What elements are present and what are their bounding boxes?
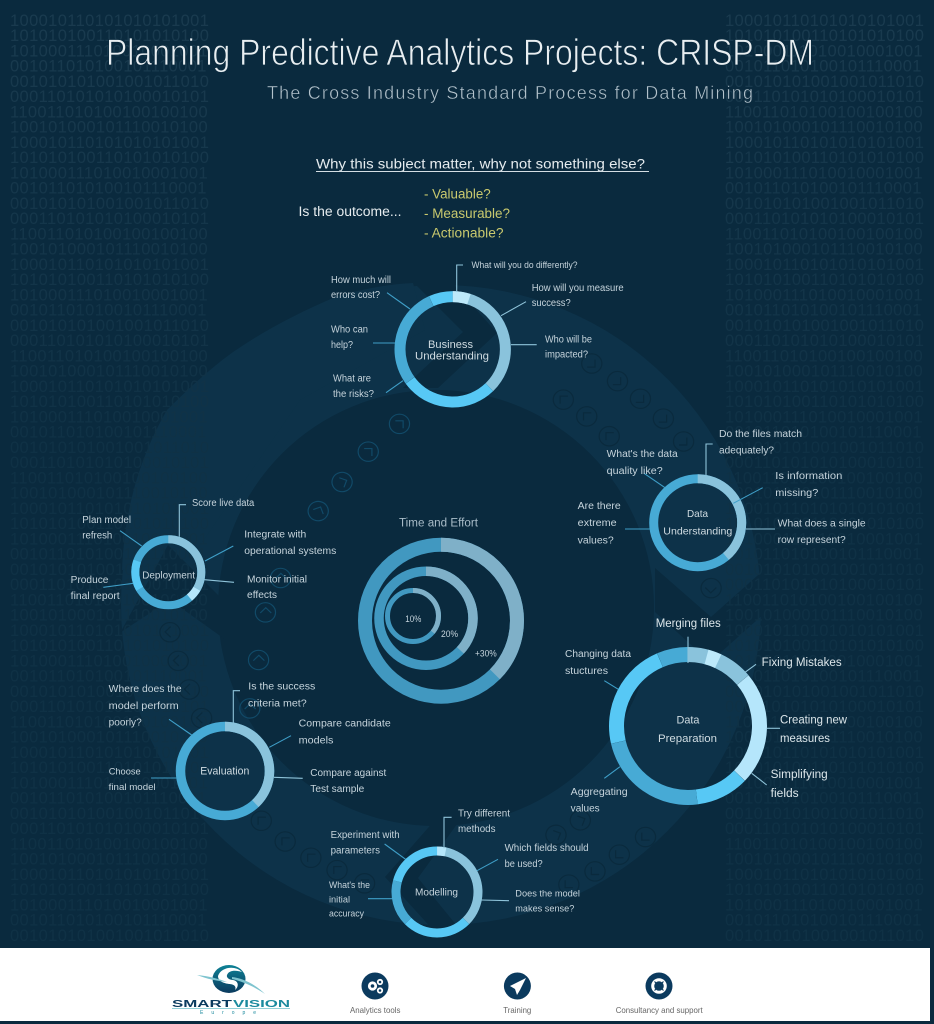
center label: evaluation: Evaluation xyxy=(200,766,249,778)
binary code texture: right: 101010100110101010100 xyxy=(725,393,924,411)
percentage labels: 20% xyxy=(441,629,458,640)
binary code texture: left: 100101000101110010100 xyxy=(10,851,208,869)
binary code texture: left: 101000111010010001001 xyxy=(10,896,208,914)
binary code texture: right: 100010110101010101001 xyxy=(725,622,924,640)
binary code texture: right: 101010100110101010100 xyxy=(725,271,924,289)
logo: Smart Vision Europe xyxy=(172,965,290,1016)
panel: evaluation xyxy=(109,682,391,816)
ring: evaluation xyxy=(180,726,270,816)
outcome criteria: - Valuable? xyxy=(424,186,491,202)
binary code texture: left: 110011010100100100100 xyxy=(10,104,208,122)
percentage labels xyxy=(405,614,497,660)
question: what will you do differently xyxy=(457,260,578,292)
question: where does the model perform poorly: Where does the xyxy=(109,684,182,695)
binary code texture: left: 101000111010010001001 xyxy=(10,774,208,792)
chart title: Time and Effort xyxy=(399,518,479,530)
logo: Smart Vision Europe: VISION xyxy=(233,999,290,1010)
binary code texture: left: 001011010100101110001 xyxy=(10,58,207,76)
question: do the files match: Do the files match xyxy=(719,429,802,440)
question: extreme values: Are there xyxy=(578,501,621,512)
binary code texture: right: 100010110101010101001 xyxy=(725,12,924,30)
footer band xyxy=(0,948,930,1021)
binary code texture: left: 000110101010100010101 xyxy=(10,454,209,472)
binary code texture: left: 000110101010100010101 xyxy=(10,698,209,716)
question: initial accuracy xyxy=(329,880,392,918)
binary code texture: right: 101010100110101010100 xyxy=(725,881,924,899)
binary code texture: left: 100010110101010101001 xyxy=(10,622,209,640)
binary code texture: left: 001010101001001011010 xyxy=(10,73,209,91)
label: training: Training xyxy=(503,1005,532,1015)
binary code texture: left: 110011010100100100100 xyxy=(10,836,208,854)
question: is the success criteria met: Is the success xyxy=(248,682,315,692)
task: integrate with operational systems: Integrate with xyxy=(244,530,306,540)
binary code texture: right: 101000111010010001001 xyxy=(725,164,923,182)
task: merging files: Merging files xyxy=(656,618,721,630)
question: how will you measure success: success? xyxy=(532,298,571,309)
binary code texture: left: 001010101001001011010 xyxy=(10,439,209,457)
binary code texture: right: 110011010100100100100 xyxy=(725,714,923,732)
binary code texture: left: 100010110101010101001 xyxy=(10,256,209,274)
question: is the success criteria met xyxy=(233,682,315,723)
middle ring: 20 percent xyxy=(379,571,473,665)
outcome criteria: - Measurable? xyxy=(424,206,510,221)
binary code texture: left: 100101000101110010100 xyxy=(10,607,208,625)
center label: modelling: Modelling xyxy=(415,888,458,898)
center label: business understanding: Understanding xyxy=(415,350,489,362)
binary code texture: left: 101010100110101010100 xyxy=(10,271,209,289)
binary code texture: left: 101000111010010001001 xyxy=(10,42,208,60)
binary code texture: right: 101000111010010001001 xyxy=(725,530,923,548)
binary code texture: right: 001010101001001011010 xyxy=(725,927,924,945)
task: changing data structures: stuctures xyxy=(565,666,608,677)
question: what are the risks: What are xyxy=(333,374,371,384)
binary code texture: left: 101010100110101010100 xyxy=(10,149,209,167)
binary code texture: left: 000110101010100010101 xyxy=(10,820,209,838)
task: simplifying fields: Simplifying xyxy=(771,769,828,781)
question: how will you measure success: How will you measure xyxy=(532,283,624,294)
task: changing data structures xyxy=(565,649,631,689)
task: choose final model xyxy=(109,766,177,793)
task: produce final report: final report xyxy=(71,591,120,602)
question: initial accuracy: What's the xyxy=(329,880,370,890)
task: compare candidate models: models xyxy=(299,736,333,746)
binary code texture: left: 101010100110101010100 xyxy=(10,27,209,45)
panel: data understanding xyxy=(578,429,866,567)
binary code texture: left: 001011010100101110001 xyxy=(10,546,207,564)
binary code texture: left: 100010110101010101001 xyxy=(10,500,209,518)
binary code texture: left: 101010100110101010100 xyxy=(10,637,209,655)
question: what will you do differently: What will you do differently? xyxy=(472,260,578,271)
binary code texture: right: 110011010100100100100 xyxy=(725,836,923,854)
binary code texture: left: 001010101001001011010 xyxy=(10,927,209,945)
binary code texture: right: 100010110101010101001 xyxy=(725,256,924,274)
background circular process arrows xyxy=(112,278,766,932)
task: experiment with parameters xyxy=(331,830,406,859)
binary code texture: right: 101010100110101010100 xyxy=(725,149,924,167)
outcome criteria: - Actionable? xyxy=(424,226,504,241)
subtitle: The Cross Industry Standard Process for Data Mining xyxy=(267,83,753,103)
center label: data understanding: Understanding xyxy=(663,526,732,538)
task: simplifying fields xyxy=(752,769,828,800)
binary code texture: right: 100101000101110010100 xyxy=(725,363,923,381)
binary code texture: right: 001011010100101110001 xyxy=(725,546,922,564)
binary code texture: left: 110011010100100100100 xyxy=(10,470,208,488)
binary code texture: right: 100010110101010101001 xyxy=(725,134,924,152)
question: what are the risks: the risks? xyxy=(333,389,374,400)
binary code texture: left: 000110101010100010101 xyxy=(10,88,209,106)
binary code texture: left: 000110101010100010101 xyxy=(10,332,209,350)
binary code texture: right: 001010101001001011010 xyxy=(725,195,924,213)
binary code texture: right: 101000111010010001001 xyxy=(725,408,923,426)
question: do the files match: adequately? xyxy=(719,446,774,456)
binary code texture: left: 100010110101010101001 xyxy=(10,12,209,30)
ring: data understanding xyxy=(654,479,742,567)
binary code texture: right: 110011010100100100100 xyxy=(725,592,923,610)
binary code texture: left: 101010100110101010100 xyxy=(10,759,209,777)
question: who can help xyxy=(331,324,395,351)
question: single row: What does a single xyxy=(778,518,866,530)
center label: data preparation: Preparation xyxy=(658,733,717,745)
question: single row xyxy=(746,518,866,546)
label: consultancy and support: Consultancy and support xyxy=(616,1005,703,1015)
task: monitor initial effects xyxy=(204,574,307,601)
binary code texture: right: 001010101001001011010 xyxy=(725,683,924,701)
question: how will you measure success xyxy=(501,283,624,316)
question: who can help: Who can xyxy=(331,324,368,336)
panel: modelling xyxy=(329,808,589,950)
task: compare against test sample: Compare against xyxy=(310,768,387,779)
ring: business understanding xyxy=(378,275,527,424)
task: creating new measures: measures xyxy=(780,733,830,745)
ring: deployment xyxy=(123,527,213,617)
center label: data preparation: Data xyxy=(676,714,700,726)
binary code texture: right: 001011010100101110001 xyxy=(725,790,922,808)
task: produce final report: Produce xyxy=(71,575,109,586)
binary code texture: left: 101010100110101010100 xyxy=(10,881,209,899)
question: single row: row represent? xyxy=(778,535,846,546)
task: integrate with operational systems xyxy=(205,530,336,561)
task: integrate with operational systems: operational systems xyxy=(244,546,336,557)
question: extreme values: extreme xyxy=(578,518,617,529)
binary code texture: right: 001010101001001011010 xyxy=(725,805,924,823)
binary code texture: left: 001011010100101110001 xyxy=(10,912,207,930)
binary code texture: right: 101010100110101010100 xyxy=(725,637,924,655)
question: who can help: help? xyxy=(331,340,353,351)
task: choose final model: Choose xyxy=(109,766,141,778)
question: do the files match xyxy=(706,429,802,475)
task: compare candidate models: Compare candidate xyxy=(299,718,391,730)
task: fixing mistakes xyxy=(745,657,842,672)
binary code texture: left: 100010110101010101001 xyxy=(10,744,209,762)
task: produce final report xyxy=(71,575,133,602)
binary code texture: left: 001011010100101110001 xyxy=(10,424,207,442)
binary code texture: right: 000110101010100010101 xyxy=(725,454,924,472)
task: try different methods: methods xyxy=(458,824,496,835)
percentage labels: +30% xyxy=(475,648,497,660)
binary code texture: right: 101000111010010001001 xyxy=(725,286,923,304)
task: compare candidate models xyxy=(269,718,391,747)
binary code texture: right: 101000111010010001001 xyxy=(725,896,923,914)
binary code texture: left: 110011010100100100100 xyxy=(10,714,208,732)
task: try different methods: Try different xyxy=(458,808,510,820)
binary code texture: left: 000110101010100010101 xyxy=(10,576,209,594)
ring: modelling xyxy=(379,834,495,950)
task: plan model refresh xyxy=(82,515,142,546)
question: initial accuracy: accuracy xyxy=(329,908,364,918)
binary code texture: left: 100010110101010101001 xyxy=(10,866,209,884)
outer ring: 30 percent xyxy=(365,545,517,697)
question: how much will errors cost: errors cost? xyxy=(331,290,380,301)
binary code texture: right: 001011010100101110001 xyxy=(725,668,922,686)
question: does the model make sense: makes sense? xyxy=(515,904,574,915)
question: who will be impacted: impacted? xyxy=(545,350,588,360)
task: experiment with parameters: Experiment with xyxy=(331,830,400,841)
question: extreme values: values? xyxy=(578,536,614,546)
question: who will be impacted: Who will be xyxy=(545,334,592,346)
panel: time and effort chart xyxy=(365,518,517,697)
binary code texture: right: 000110101010100010101 xyxy=(725,210,924,228)
question: where does the model perform poorly: model perform xyxy=(109,701,179,712)
question: how much will errors cost: How much will xyxy=(331,275,391,286)
task: score live data xyxy=(179,498,255,537)
task: creating new measures: Creating new xyxy=(780,714,848,726)
question: is information missing xyxy=(733,471,842,503)
question: is the success criteria met: criteria met? xyxy=(248,698,307,710)
task: simplifying fields: fields xyxy=(771,788,799,800)
binary code texture: right: 000110101010100010101 xyxy=(725,820,924,838)
icon: paper plane xyxy=(504,972,531,1000)
question: is information missing: missing? xyxy=(775,488,819,499)
task: changing data structures: Changing data xyxy=(565,649,631,660)
binary code texture: right: 000110101010100010101 xyxy=(725,88,924,106)
binary code texture: right: 100101000101110010100 xyxy=(725,607,923,625)
binary code texture: left: 101000111010010001001 xyxy=(10,286,208,304)
question: how much will errors cost xyxy=(331,275,410,309)
binary code texture: right: 001011010100101110001 xyxy=(725,424,922,442)
task: aggregating values: values xyxy=(571,804,600,815)
binary code texture: right: 101000111010010001001 xyxy=(725,652,923,670)
binary code texture: left: 110011010100100100100 xyxy=(10,348,208,366)
binary code texture: right: 001011010100101110001 xyxy=(725,912,922,930)
question: does the model make sense: Does the model xyxy=(515,888,580,900)
binary code texture: left: 100101000101110010100 xyxy=(10,119,208,137)
task: monitor initial effects: effects xyxy=(247,590,277,601)
binary code texture: left: 001010101001001011010 xyxy=(10,683,209,701)
binary code texture: right: 100101000101110010100 xyxy=(725,851,923,869)
logo: Smart Vision Europe: SMART xyxy=(172,999,232,1010)
binary code texture: left: 001010101001001011010 xyxy=(10,561,209,579)
binary code texture: right: 001011010100101110001 xyxy=(725,180,922,198)
binary code texture: left: 001011010100101110001 xyxy=(10,790,207,808)
task: plan model refresh: refresh xyxy=(82,530,112,542)
task: monitor initial effects: Monitor initial xyxy=(247,574,307,586)
binary code texture: left: 001010101001001011010 xyxy=(10,195,209,213)
task: aggregating values: Aggregating xyxy=(571,787,628,798)
binary code texture: left: 101010100110101010100 xyxy=(10,393,209,411)
binary code texture: right: 101010100110101010100 xyxy=(725,759,924,777)
center label: data understanding: Data xyxy=(687,508,708,520)
title: Planning Predictive Analytics Projects: CRISP-DM xyxy=(106,32,814,73)
center label: deployment: Deployment xyxy=(142,570,195,582)
question: who will be impacted xyxy=(511,334,592,360)
binary code texture: right: 101000111010010001001 xyxy=(725,42,923,60)
binary code texture: left: 110011010100100100100 xyxy=(10,592,208,610)
task: merging files xyxy=(656,618,721,663)
binary code texture: left: 100101000101110010100 xyxy=(10,729,208,747)
task: plan model refresh: Plan model xyxy=(82,515,131,526)
icon: gears xyxy=(362,972,388,1000)
task: experiment with parameters: parameters xyxy=(331,846,380,856)
binary code texture: right: 101010100110101010100 xyxy=(725,515,924,533)
binary code texture: right: 001010101001001011010 xyxy=(725,439,924,457)
binary code texture: right: 100101000101110010100 xyxy=(725,485,923,503)
binary code texture: right: 000110101010100010101 xyxy=(725,698,924,716)
question: where does the model perform poorly xyxy=(109,684,192,735)
label: analytics tools: Analytics tools xyxy=(350,1005,400,1015)
center label: data preparation xyxy=(658,714,717,745)
task: compare against test sample: Test sample xyxy=(310,784,365,795)
binary code texture: left: 100101000101110010100 xyxy=(10,241,208,259)
question: which fields should be used: Which fields should xyxy=(505,843,589,854)
percentage labels: 10% xyxy=(405,614,422,625)
question: initial accuracy: initial xyxy=(329,894,350,904)
binary code texture: right: 100101000101110010100 xyxy=(725,119,923,137)
question: does the model make sense xyxy=(481,888,580,915)
binary code texture: right: 101000111010010001001 xyxy=(725,774,923,792)
binary code texture: right: 100010110101010101001 xyxy=(725,744,924,762)
logo: Smart Vision Europe: Europe xyxy=(200,1010,256,1016)
binary code texture: right: 100101000101110010100 xyxy=(725,729,923,747)
binary code texture: right: 100010110101010101001 xyxy=(725,378,924,396)
binary code texture: left: 101000111010010001001 xyxy=(10,164,208,182)
task: fixing mistakes: Fixing Mistakes xyxy=(762,657,842,669)
question: which fields should be used: be used? xyxy=(505,859,543,870)
binary code texture: left: 001011010100101110001 xyxy=(10,668,207,686)
icon: lifebuoy xyxy=(646,972,672,1000)
binary code texture: right: 110011010100100100100 xyxy=(725,348,923,366)
binary code texture: right: 001011010100101110001 xyxy=(725,58,922,76)
binary code texture: right: 100010110101010101001 xyxy=(725,866,924,884)
binary code texture: left: 001010101001001011010 xyxy=(10,805,209,823)
binary code texture: right: 001010101001001011010 xyxy=(725,561,924,579)
binary code texture: left: 001011010100101110001 xyxy=(10,302,207,320)
binary code texture: left: 100101000101110010100 xyxy=(10,363,208,381)
panel: deployment xyxy=(71,498,336,617)
binary code texture: right: 001010101001001011010 xyxy=(725,317,924,335)
clock icons along the process path xyxy=(153,354,725,894)
outcome criteria xyxy=(298,186,510,241)
center label: business understanding xyxy=(415,339,489,362)
task: choose final model: final model xyxy=(109,782,156,793)
task: compare against test sample xyxy=(274,768,387,795)
question heading: Why this subject matter, why not something else? xyxy=(316,156,645,172)
binary code texture: right: 001010101001001011010 xyxy=(725,73,924,91)
binary code texture: left: 000110101010100010101 xyxy=(10,210,209,228)
panel: data preparation xyxy=(565,618,848,827)
binary code texture: right: 001011010100101110001 xyxy=(725,302,922,320)
ring: data preparation xyxy=(587,625,789,827)
center label: data understanding xyxy=(663,508,732,538)
question: data quality: quality like? xyxy=(607,466,663,477)
binary code texture: left: 001010101001001011010 xyxy=(10,317,209,335)
binary code texture: left: 101000111010010001001 xyxy=(10,408,208,426)
question: extreme values xyxy=(578,501,650,546)
binary code texture: right: 100010110101010101001 xyxy=(725,500,924,518)
binary code texture: left: 100010110101010101001 xyxy=(10,378,209,396)
question: data quality xyxy=(607,449,678,488)
question: which fields should be used xyxy=(477,843,589,871)
binary code texture: right: 101010100110101010100 xyxy=(725,27,924,45)
binary code texture: right: 100101000101110010100 xyxy=(725,241,923,259)
binary code texture: left: 100010110101010101001 xyxy=(10,134,209,152)
question: where does the model perform poorly: poorly? xyxy=(109,718,142,728)
question: is information missing: Is information xyxy=(775,471,842,482)
binary code texture: right: 110011010100100100100 xyxy=(725,470,923,488)
binary code texture: left: 101010100110101010100 xyxy=(10,515,209,533)
binary code texture: left: 100101000101110010100 xyxy=(10,485,208,503)
question: data quality: What's the data xyxy=(607,449,678,460)
binary code texture: left: 101000111010010001001 xyxy=(10,652,208,670)
outcome criteria: Is the outcome... xyxy=(298,204,402,219)
task: creating new measures xyxy=(767,714,848,745)
center label: business understanding: Business xyxy=(428,339,473,351)
binary code texture: left: 101000111010010001001 xyxy=(10,530,208,548)
binary code texture: right: 000110101010100010101 xyxy=(725,332,924,350)
binary code texture: left: 110011010100100100100 xyxy=(10,226,208,244)
task: try different methods xyxy=(444,808,510,848)
binary code texture: left: 001011010100101110001 xyxy=(10,180,207,198)
binary code texture: right: 110011010100100100100 xyxy=(725,104,923,122)
task: score live data: Score live data xyxy=(192,498,255,509)
binary code texture: right: 110011010100100100100 xyxy=(725,226,923,244)
task: aggregating values xyxy=(571,767,628,815)
panel: business understanding xyxy=(331,260,624,424)
inner ring: 10 percent xyxy=(388,590,438,642)
question: what are the risks xyxy=(333,374,403,400)
binary code texture: right: 000110101010100010101 xyxy=(725,576,924,594)
